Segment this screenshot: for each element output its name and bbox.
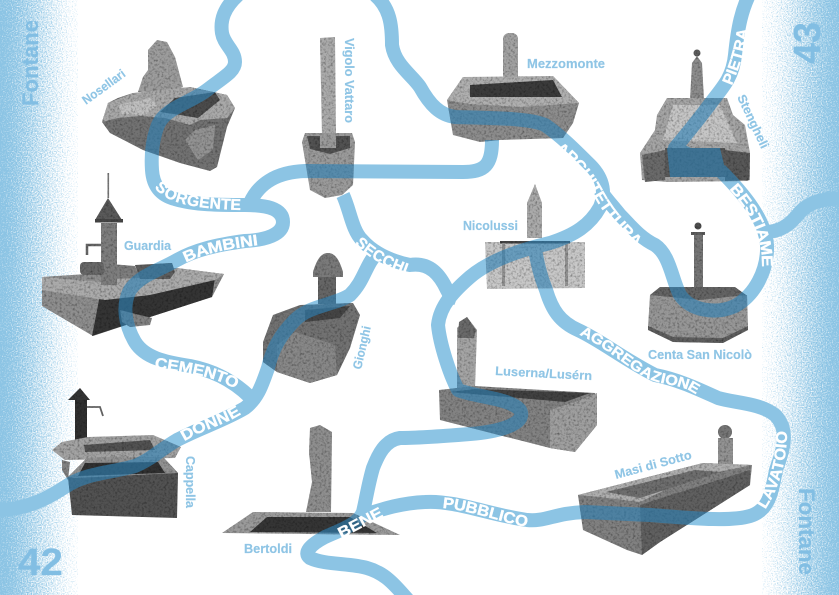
river overlay on fountains — [66, 88, 748, 534]
river labels: CEMENTO — [156, 358, 238, 387]
page number 43: 43 — [787, 22, 829, 64]
section title right: Fontane — [794, 488, 819, 575]
fountain names: Luserna/Lusérn — [495, 364, 592, 383]
fountain names: Bertoldi — [244, 542, 292, 556]
fountains — [42, 33, 752, 555]
fountain: Masi di Sotto — [578, 425, 752, 555]
page number 42: 42 — [18, 542, 63, 584]
fountain: Cappella — [52, 388, 181, 518]
river labels — [156, 30, 788, 538]
fountain: Nicolussi — [485, 184, 585, 289]
fountain names: Guardia — [124, 239, 172, 253]
river labels: DONNE — [180, 405, 241, 441]
river labels: PIETRA — [722, 30, 746, 85]
fountain names: Centa San Nicolò — [648, 348, 752, 362]
fountain names: Cappella — [183, 456, 197, 509]
river labels: SORGENTE — [156, 182, 240, 210]
river labels: BAMBINI — [182, 234, 258, 262]
fountain: Guardia — [42, 173, 224, 336]
fountain: Stengheli — [640, 50, 750, 182]
section title left: Fontane — [18, 20, 43, 106]
fountain: Bertoldi — [222, 425, 400, 535]
fountain names: Gionghi — [350, 325, 374, 371]
fountain names: Masi di Sotto — [613, 448, 693, 482]
fountain names: Nicolussi — [463, 219, 518, 233]
river labels: BESTIAME — [730, 182, 773, 266]
river labels: SECCHI — [356, 238, 409, 272]
river labels: ARCHITETTURA — [561, 144, 640, 242]
river labels: AGGREGAZIONE — [579, 328, 701, 394]
fountain: Mezzomonte — [447, 33, 579, 142]
river labels: BENE — [337, 507, 384, 538]
fountain: Gionghi — [263, 253, 360, 383]
left edge dithered gradient — [0, 0, 78, 595]
fountain names: Nosellari — [80, 67, 128, 107]
fountain names: Vigolo Vattaro — [342, 38, 356, 123]
fountain: Vigolo Vattaro — [302, 37, 355, 198]
fountain: Luserna/Lusérn — [439, 317, 597, 452]
right edge dithered gradient — [762, 0, 839, 595]
fountain: Nosellari — [102, 40, 235, 171]
fountain names: Mezzomonte — [527, 57, 605, 71]
river labels: PUBBLICO — [443, 497, 528, 526]
fountain: Centa San Nicolò — [648, 222, 748, 343]
river labels: LAVATOIO — [757, 432, 788, 509]
fountain names — [80, 38, 771, 556]
fountain names: Stengheli — [734, 92, 771, 151]
